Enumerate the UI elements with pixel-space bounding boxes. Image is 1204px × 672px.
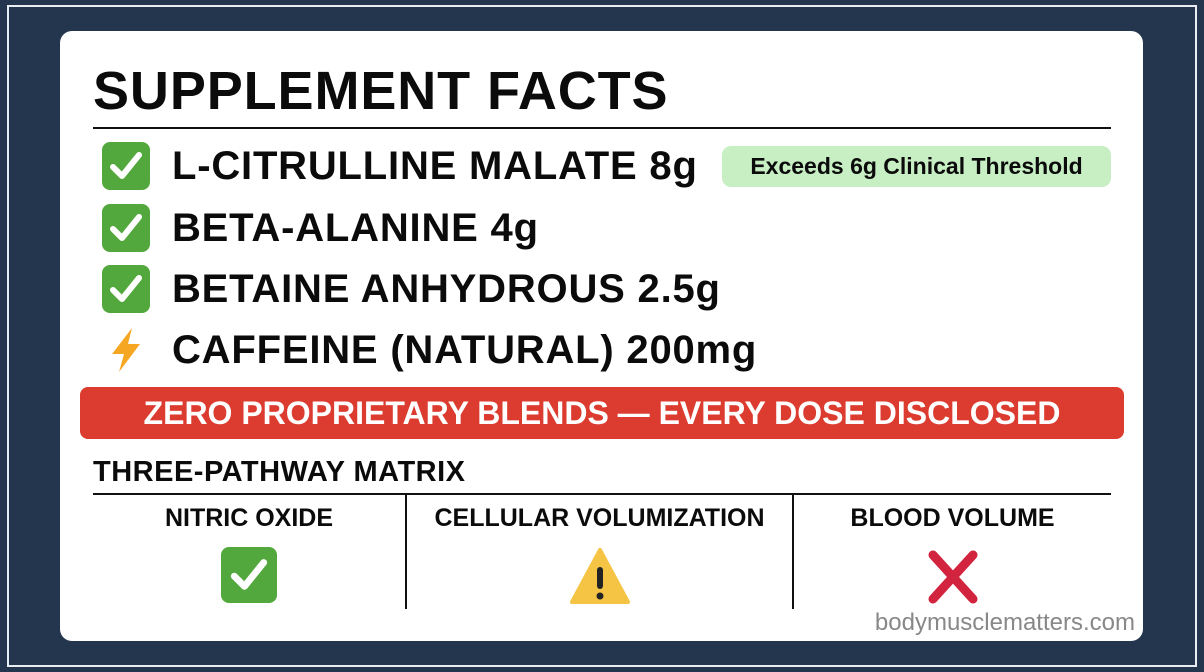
banner xyxy=(80,387,1124,439)
item: beta-alanine: BETA-ALANINE 4g xyxy=(172,206,539,250)
item: citrulline: L-CITRULLINE MALATE 8g xyxy=(172,144,698,188)
column: nitric oxide xyxy=(165,504,333,603)
column: cellular volumization: CELLULAR VOLUMIZATION xyxy=(434,504,765,532)
title: SUPPLEMENT FACTS xyxy=(93,61,668,121)
column: nitric oxide: NITRIC OXIDE xyxy=(165,504,333,532)
pill: clinical threshold xyxy=(722,146,1111,187)
item: caffeine: CAFFEINE (NATURAL) 200mg xyxy=(172,328,757,372)
column: cellular volumization xyxy=(434,504,765,604)
pill: clinical threshold: Exceeds 6g Clinical Threshold xyxy=(750,153,1083,179)
column: blood volume xyxy=(850,504,1055,604)
column: blood volume: BLOOD VOLUME xyxy=(850,504,1055,532)
footer: website: bodymusclematters.com xyxy=(875,609,1135,636)
matrix heading: THREE-PATHWAY MATRIX xyxy=(93,456,466,488)
item: betaine: BETAINE ANHYDROUS 2.5g xyxy=(172,266,721,310)
banner: ZERO PROPRIETARY BLENDS — EVERY DOSE DISCLOSED xyxy=(144,394,1060,430)
